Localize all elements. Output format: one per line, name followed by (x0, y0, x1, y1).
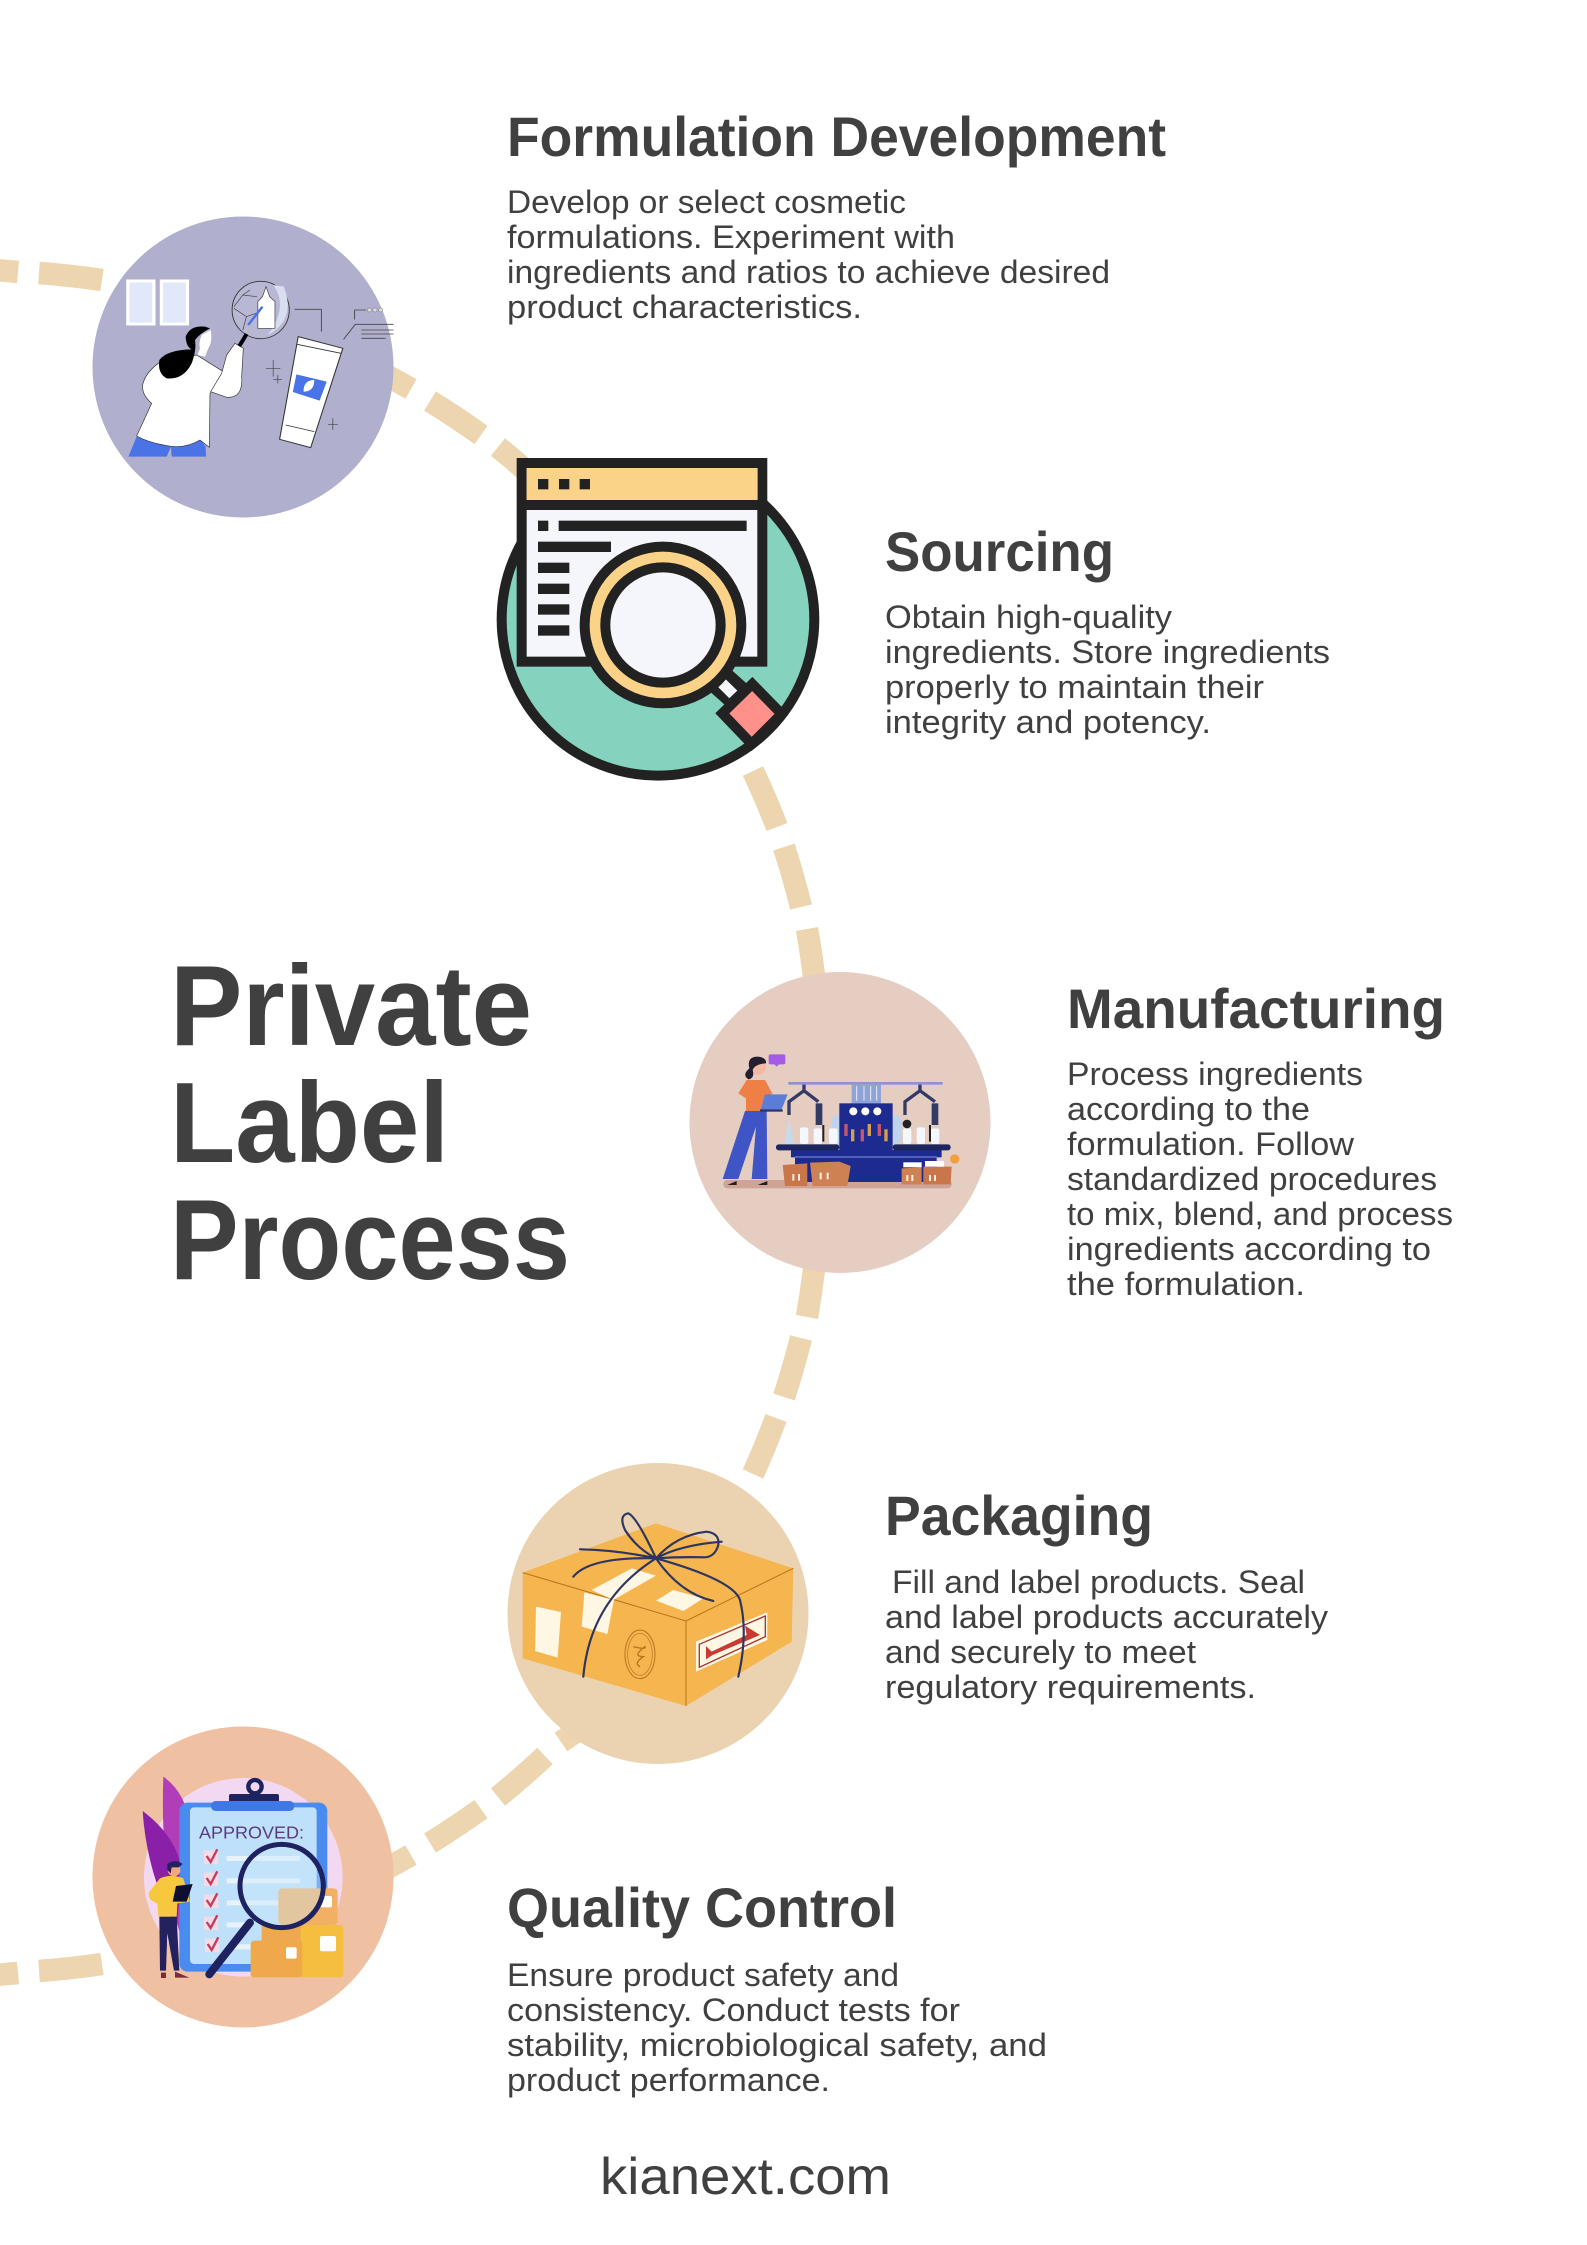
description: sourcing: Obtain high-quality (885, 599, 1172, 635)
heading: Packaging: Packaging (885, 1484, 1153, 1547)
description: formulation: formulations. Experiment with (507, 219, 955, 255)
icon: approved checklist with magnifier: APPROVED: (199, 1822, 304, 1842)
dashed curved path connecting the steps (0, 270, 815, 1975)
description: packaging (885, 1564, 1328, 1705)
description: formulation: Develop or select cosmetic (507, 184, 906, 220)
description: manufacturing: to mix, blend, and process (1067, 1196, 1453, 1232)
panel: manufacturing (690, 972, 1453, 1302)
title: Label (170, 1060, 449, 1187)
description: sourcing: integrity and potency. (885, 704, 1211, 740)
title: Process (170, 1177, 570, 1304)
heading: Quality Control: Quality Control (507, 1876, 897, 1939)
heading: Formulation Development: Formulation Development (507, 105, 1166, 168)
icon: tied cardboard box (508, 1463, 808, 1764)
title: Private (170, 943, 532, 1070)
panel: formulation development (92, 105, 1166, 518)
description: quality control: consistency. Conduct tests for (507, 1992, 960, 2028)
description: packaging: and label products accurately (885, 1599, 1328, 1635)
description: quality control: Ensure product safety and (507, 1957, 899, 1993)
description: sourcing (885, 599, 1330, 740)
description: manufacturing: ingredients according to (1067, 1231, 1431, 1267)
description: manufacturing: the formulation. (1067, 1266, 1305, 1302)
description: packaging: regulatory requirements. (885, 1669, 1256, 1705)
panel: quality control (92, 1726, 1047, 2098)
panel: sourcing (502, 463, 1330, 776)
description: manufacturing: according to the (1067, 1091, 1310, 1127)
description: packaging: Fill and label products. Seal (892, 1564, 1305, 1600)
heading: Manufacturing: Manufacturing (1067, 977, 1445, 1040)
description: packaging: and securely to meet (885, 1634, 1196, 1670)
icon: worker at bottling production line (690, 972, 990, 1273)
description: manufacturing: Process ingredients (1067, 1056, 1363, 1092)
description: formulation (507, 184, 1110, 325)
panel: packaging (508, 1463, 1328, 1764)
description: sourcing: ingredients. Store ingredients (885, 634, 1330, 670)
description: manufacturing: formulation. Follow (1067, 1126, 1355, 1162)
description: formulation: product characteristics. (507, 289, 862, 325)
description: quality control: stability, microbiological safety, and (507, 2027, 1047, 2063)
description: manufacturing: standardized procedures (1067, 1161, 1437, 1197)
icon: approved checklist with magnifier (92, 1726, 394, 2028)
description: quality control: product performance. (507, 2062, 830, 2098)
icon: browser window with magnifying glass (502, 463, 814, 776)
website footer: kianext.com (600, 2148, 891, 2206)
heading: Sourcing: Sourcing (885, 520, 1114, 583)
description: formulation: ingredients and ratios to achieve desired (507, 254, 1110, 290)
description: manufacturing (1067, 1056, 1453, 1302)
title (170, 943, 570, 1304)
description: sourcing: properly to maintain their (885, 669, 1264, 705)
description: quality control (507, 1957, 1047, 2098)
icon: scientist inspecting cosmetic tube (92, 216, 394, 518)
